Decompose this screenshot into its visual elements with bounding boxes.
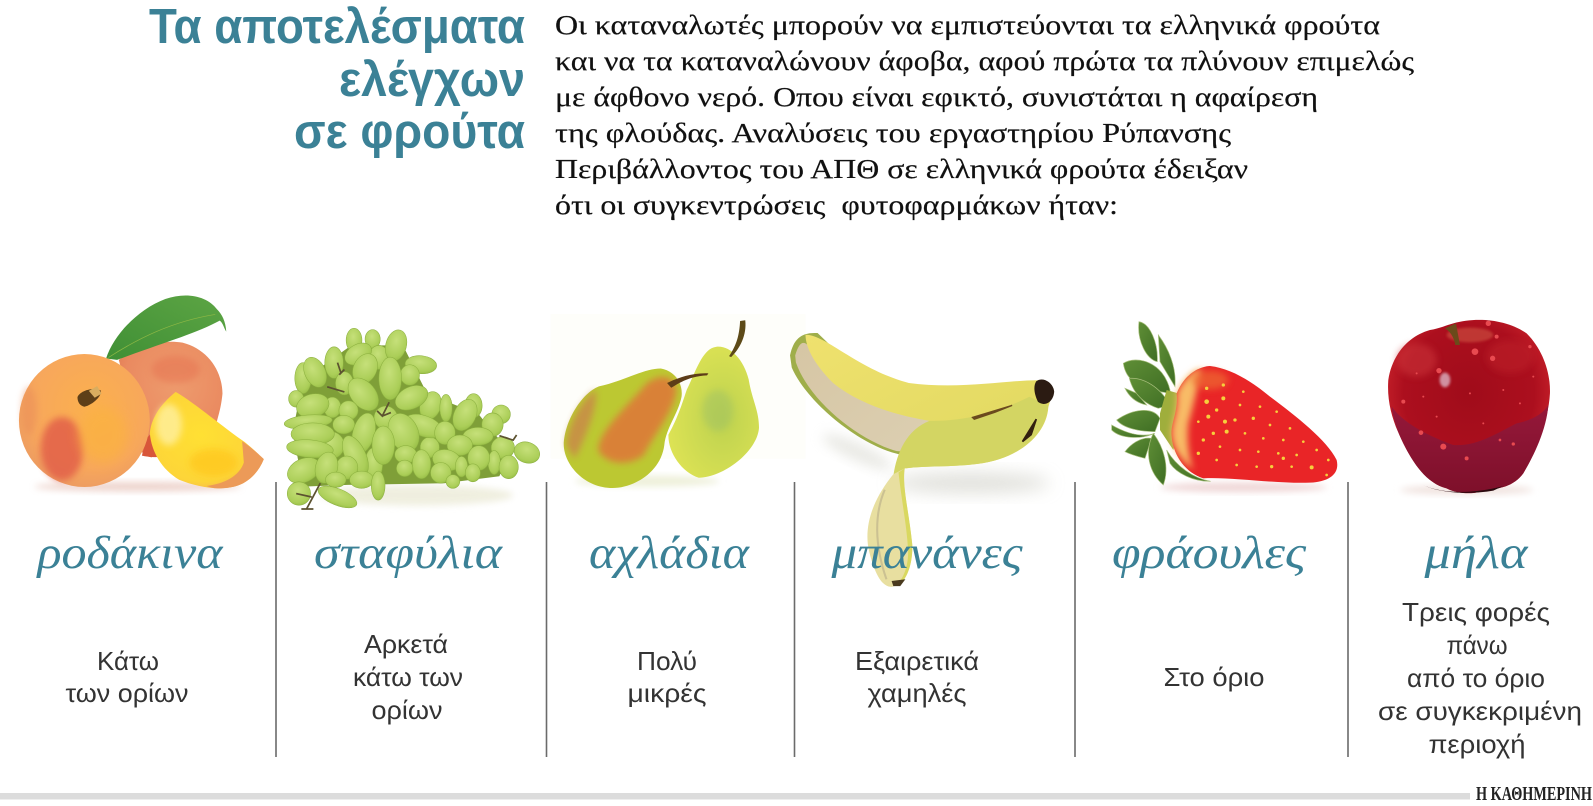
result: peaches: Κάτω [97,646,159,676]
icon: grapes [283,327,543,512]
icon: apple [1388,320,1550,495]
icon: strawberry [1112,322,1337,492]
result: bananas: Εξαιρετικά [855,646,979,676]
result: apples: από το όριο [1407,663,1545,693]
panel: grapes [283,327,543,725]
title: σε φρούτα [294,105,525,159]
title [149,0,525,159]
result: apples: πάνω [1446,630,1508,660]
result: apples: σε συγκεκριμένη [1378,696,1582,726]
text block: introduction: Περιβάλλοντος του ΑΠΘ σε ελληνικά φρούτα έδειξαν [555,153,1248,184]
panel: strawberries [1112,322,1337,692]
result: grapes [353,629,463,725]
label: grapes: σταφύλια [314,527,503,579]
label: peaches: ροδάκινα [35,527,224,579]
text block: introduction [555,9,1414,220]
result: peaches: των ορίων [66,678,188,708]
text block: introduction: με άφθονο νερό. Οπου είναι εφικτό, συνιστάται η αφαίρεση [555,81,1318,112]
result: pears: Πολύ [637,646,697,676]
result: pears [628,646,706,708]
result: bananas: χαμηλές [868,678,966,708]
text block: introduction: Οι καταναλωτές μπορούν να εμπιστεύονται τα ελληνικά φρούτα [555,9,1380,40]
text block: introduction: ότι οι συγκεντρώσεις φυτοφαρμάκων ήταν: [555,189,1118,220]
result: bananas [855,646,979,708]
panel: pears [551,314,806,708]
label: apples: μήλα [1423,527,1529,579]
result: grapes: ορίων [372,695,442,725]
title: ελέγχων [339,53,525,107]
panel: bananas [790,333,1054,708]
result: strawberries: Στο όριο [1164,662,1264,692]
panel: peaches [19,295,264,708]
result: apples: Τρεις φορές [1402,597,1550,627]
result: peaches [66,646,188,708]
result: apples: περιοχή [1428,729,1526,759]
text block: introduction: της φλούδας. Αναλύσεις του εργαστηρίου Ρύπανσης [555,117,1231,148]
result: apples [1378,597,1582,759]
result: grapes: Αρκετά [364,629,448,659]
panel: apples [1378,320,1582,759]
icon: banana [790,333,1054,587]
label: strawberries: φράουλες [1112,527,1307,579]
text block: introduction: και να τα καταναλώνουν άφοβα, αφού πρώτα τα πλύνουν επιμελώς [555,45,1414,76]
icon: pears [551,314,806,488]
label: pears: αχλάδια [589,527,750,579]
title: Τα αποτελέσματα [149,0,525,54]
label: bananas: μπανάνες [830,527,1024,579]
icon: peaches [19,295,264,491]
result: pears: μικρές [628,678,706,708]
result: grapes: κάτω των [353,662,463,692]
